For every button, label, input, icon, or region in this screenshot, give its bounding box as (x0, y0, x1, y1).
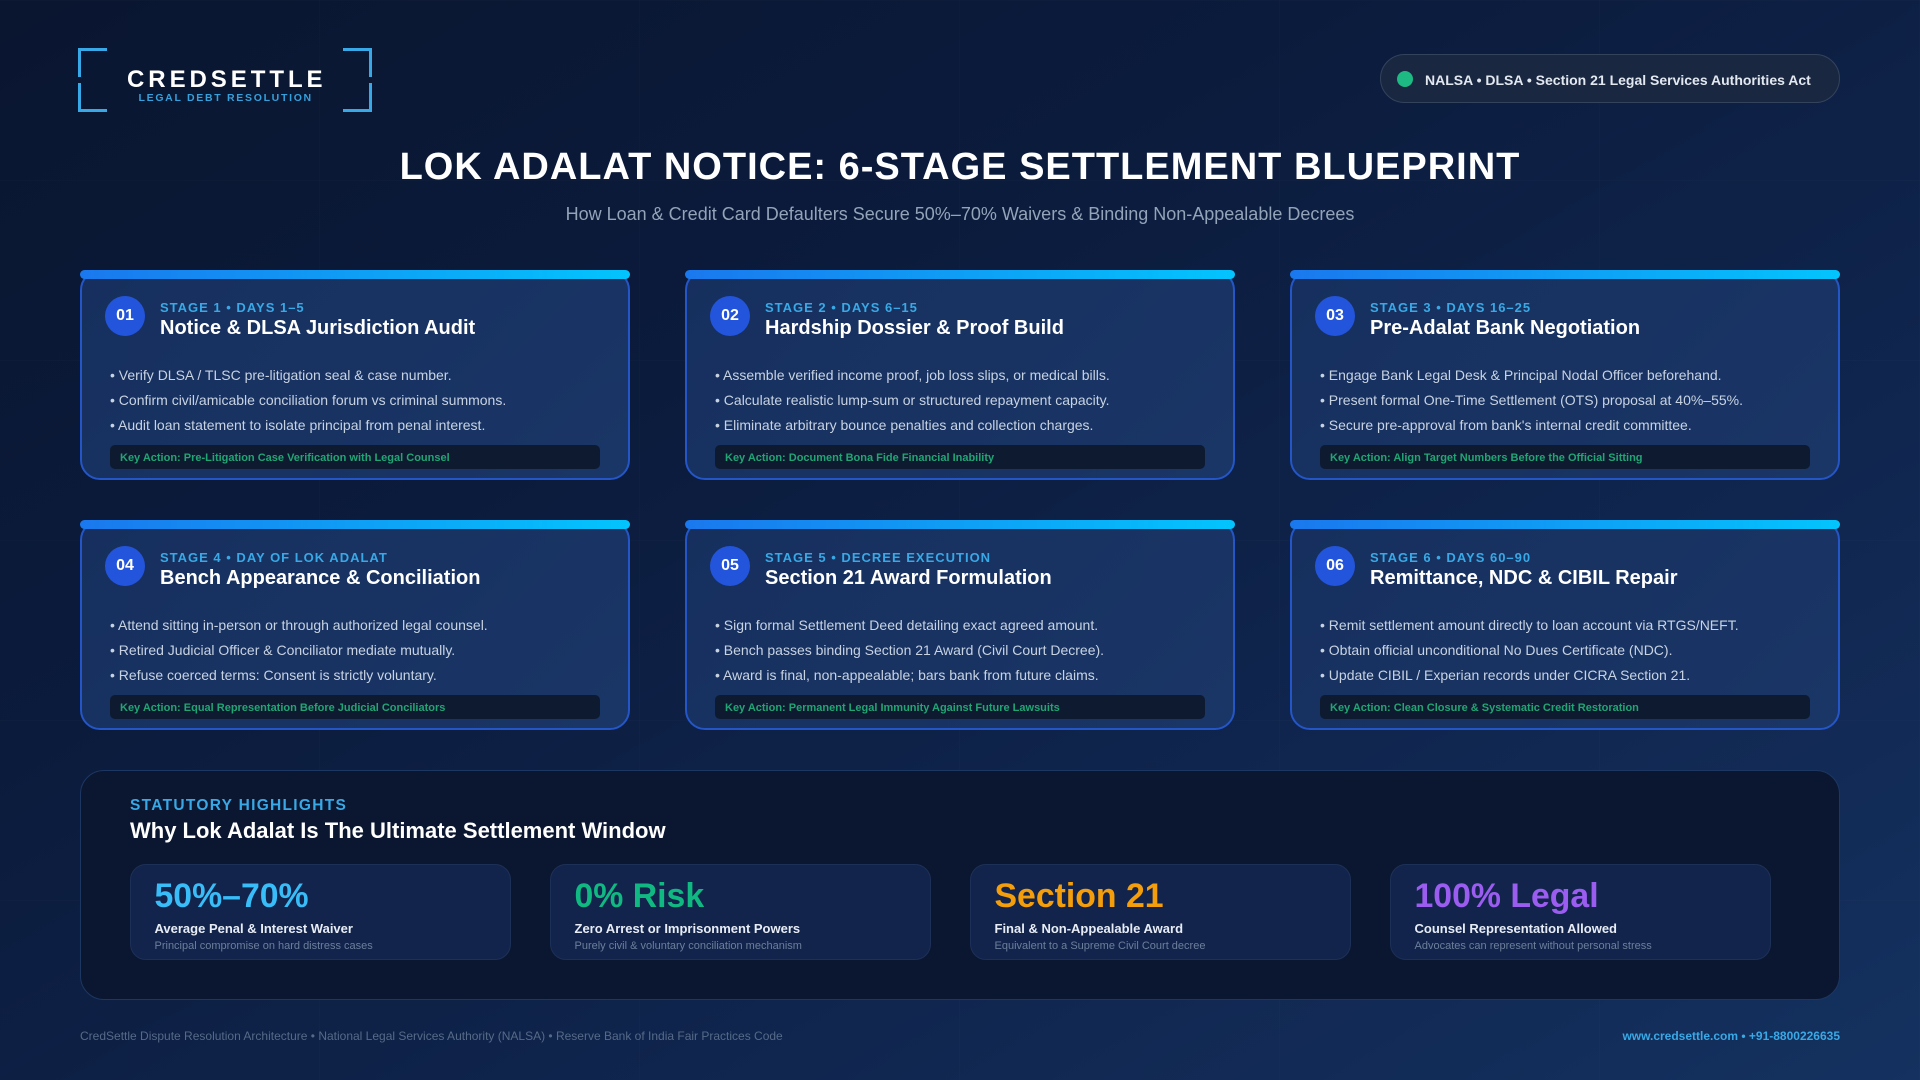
stage 1 bullet: • Confirm civil/amicable conciliation forum vs criminal summons. (110, 392, 506, 408)
stage 5 bullet: • Sign formal Settlement Deed detailing exact agreed amount. (715, 617, 1098, 633)
stage 3 heading: Pre-Adalat Bank Negotiation (1370, 317, 1640, 339)
stage 6 bullet: • Update CIBIL / Experian records under CICRA Section 21. (1320, 667, 1690, 683)
stage 1 heading: Notice & DLSA Jurisdiction Audit (160, 317, 475, 339)
stage 5 key action (715, 695, 1205, 719)
title: LOK ADALAT NOTICE: 6-STAGE SETTLEMENT BLUEPRINT (400, 146, 1520, 188)
stage 2 key action: Key Action: Document Bona Fide Financial Inability (725, 452, 994, 464)
section 21 value: Section 21 (994, 877, 1164, 915)
logo wordmark: CREDSETTLE (127, 66, 327, 93)
stage 5 heading: Section 21 Award Formulation (765, 567, 1052, 589)
stage 6 timing: STAGE 6 • DAYS 60–90 (1370, 550, 1531, 565)
stat: risk (550, 864, 930, 960)
risk note: Purely civil & voluntary conciliation mechanism (574, 940, 802, 952)
stage 3 timing: STAGE 3 • DAYS 16–25 (1370, 300, 1531, 315)
stage 4 heading: Bench Appearance & Conciliation (160, 567, 480, 589)
stage 3 number (1315, 296, 1355, 336)
stage 6 key action (1320, 695, 1810, 719)
stage 5 key action: Key Action: Permanent Legal Immunity Against Future Lawsuits (725, 702, 1060, 714)
panel: stage 6 (1290, 520, 1840, 730)
stage 4 timing: STAGE 4 • DAY OF LOK ADALAT (160, 550, 388, 565)
panel: stage 5 (685, 520, 1235, 730)
stage 2 heading: Hardship Dossier & Proof Build (765, 317, 1064, 339)
risk label: Zero Arrest or Imprisonment Powers (574, 921, 800, 936)
stage 6 key action: Key Action: Clean Closure & Systematic Credit Restoration (1330, 702, 1639, 714)
stage 6 bullet: • Remit settlement amount directly to loan account via RTGS/NEFT. (1320, 617, 1739, 633)
section 21 label: Final & Non-Appealable Award (994, 921, 1183, 936)
logo tagline: LEGAL DEBT RESOLUTION (138, 92, 313, 104)
stage 3 key action: Key Action: Align Target Numbers Before the Official Sitting (1330, 452, 1643, 464)
waiver value: 50%–70% (154, 877, 309, 915)
stage 1 key action (110, 445, 600, 469)
footer source line: CredSettle Dispute Resolution Architecture • National Legal Services Authority (NALSA) • Reserve Bank of India Fair Practices Code (80, 1029, 783, 1043)
stat: waiver (130, 864, 510, 960)
stage 3 bullet: • Engage Bank Legal Desk & Principal Nodal Officer beforehand. (1320, 367, 1722, 383)
stage 1 bullet: • Audit loan statement to isolate principal from penal interest. (110, 417, 485, 433)
stage 2 timing: STAGE 2 • DAYS 6–15 (765, 300, 918, 315)
legal value: 100% Legal (1414, 877, 1599, 915)
stage 2 bullet: • Assemble verified income proof, job loss slips, or medical bills. (715, 367, 1110, 383)
waiver label: Average Penal & Interest Waiver (154, 921, 353, 936)
stage 2 bullet: • Eliminate arbitrary bounce penalties and collection charges. (715, 417, 1093, 433)
stage 1 timing: STAGE 1 • DAYS 1–5 (160, 300, 305, 315)
stage 5 number: 05 (721, 557, 739, 574)
stage 5 number (710, 546, 750, 586)
stage 4 number: 04 (116, 557, 134, 574)
legal label: Counsel Representation Allowed (1414, 921, 1617, 936)
stat: legal (1390, 864, 1770, 960)
stage 4 bullet: • Retired Judicial Officer & Conciliator mediate mutually. (110, 642, 455, 658)
stage 4 number (105, 546, 145, 586)
panel: stage 4 (80, 520, 630, 730)
stage 1 bullet: • Verify DLSA / TLSC pre-litigation seal & case number. (110, 367, 452, 383)
stage 2 bullet: • Calculate realistic lump-sum or structured repayment capacity. (715, 392, 1109, 408)
stage 4 bullet: • Refuse coerced terms: Consent is strictly voluntary. (110, 667, 437, 683)
stage 3 number: 03 (1326, 307, 1344, 324)
risk value: 0% Risk (574, 877, 704, 915)
stage 5 bullet: • Bench passes binding Section 21 Award (Civil Court Decree). (715, 642, 1104, 658)
stage 3 key action (1320, 445, 1810, 469)
panel: stage 2 (685, 270, 1235, 480)
waiver note: Principal compromise on hard distress cases (154, 940, 373, 952)
panel: stage 1 (80, 270, 630, 480)
authority badge (1380, 54, 1840, 103)
highlights heading: Why Lok Adalat Is The Ultimate Settlement Window (130, 818, 666, 843)
logo (78, 48, 372, 112)
stage 2 number: 02 (721, 307, 739, 324)
stage 4 bullet: • Attend sitting in-person or through authorized legal counsel. (110, 617, 488, 633)
panel: statutory highlights (80, 770, 1840, 1000)
stage 5 timing: STAGE 5 • DECREE EXECUTION (765, 550, 991, 565)
logo brackets (78, 48, 372, 112)
stage 4 key action (110, 695, 600, 719)
stage 2 key action (715, 445, 1205, 469)
badge text: NALSA • DLSA • Section 21 Legal Services Authorities Act (1425, 72, 1811, 88)
stage 6 bullet: • Obtain official unconditional No Dues Certificate (NDC). (1320, 642, 1672, 658)
stage 6 number: 06 (1326, 557, 1344, 574)
stage 6 number (1315, 546, 1355, 586)
stage 6 heading: Remittance, NDC & CIBIL Repair (1370, 567, 1677, 589)
stat: section 21 (970, 864, 1350, 960)
highlights eyebrow: STATUTORY HIGHLIGHTS (130, 797, 347, 814)
stage 3 bullet: • Secure pre-approval from bank's internal credit committee. (1320, 417, 1692, 433)
stage 1 number (105, 296, 145, 336)
panel: stage 3 (1290, 270, 1840, 480)
stage 2 number (710, 296, 750, 336)
stage 5 bullet: • Award is final, non-appealable; bars bank from future claims. (715, 667, 1099, 683)
stage 1 key action: Key Action: Pre-Litigation Case Verification with Legal Counsel (120, 452, 450, 464)
stage 1 number: 01 (116, 307, 134, 324)
legal note: Advocates can represent without personal stress (1414, 940, 1652, 952)
icon: status dot (1397, 71, 1413, 87)
stage 4 key action: Key Action: Equal Representation Before Judicial Conciliators (120, 702, 445, 714)
stage 3 bullet: • Present formal One-Time Settlement (OTS) proposal at 40%–55%. (1320, 392, 1743, 408)
section 21 note: Equivalent to a Supreme Civil Court decree (994, 940, 1205, 952)
footer contact: www.credsettle.com • +91-8800226635 (1622, 1029, 1840, 1043)
subtitle: How Loan & Credit Card Defaulters Secure 50%–70% Waivers & Binding Non-Appealable Decrees (566, 204, 1354, 224)
